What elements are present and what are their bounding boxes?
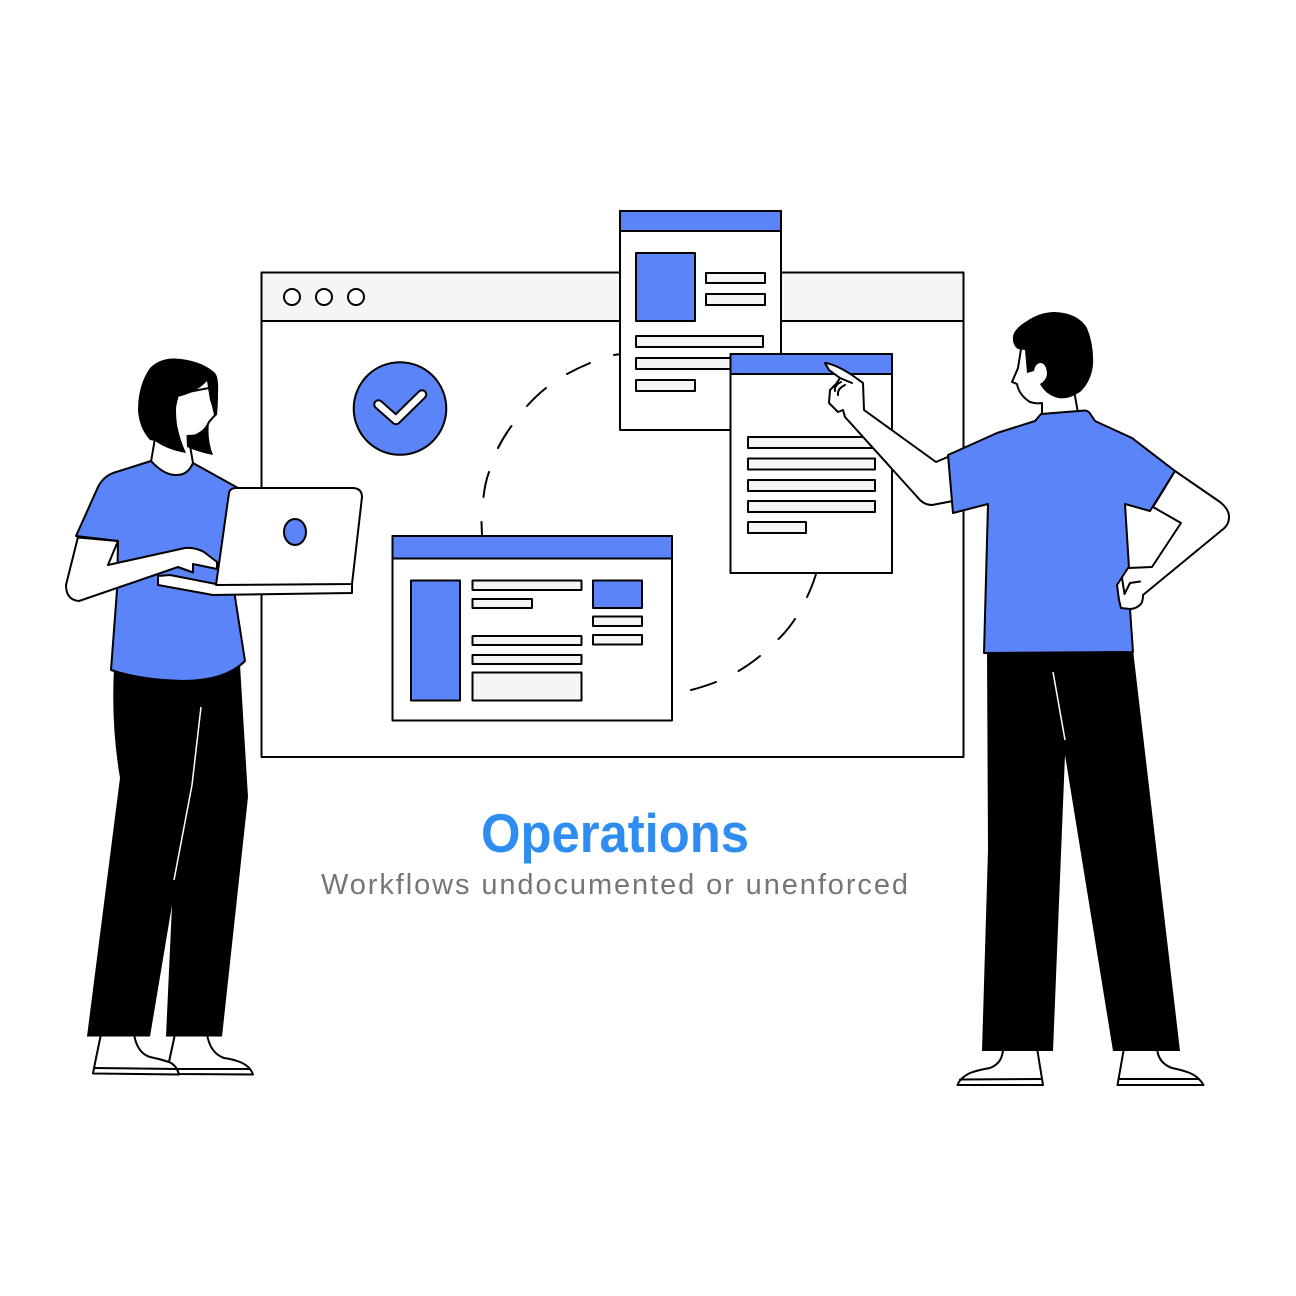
background browser window [262,272,964,757]
subtitle: Workflows undocumented or unenforced [321,869,908,901]
document card: top [620,211,781,430]
man: trousers [982,650,1180,1051]
man: trouser crease [1053,672,1065,740]
icon: check badge [354,362,446,455]
woman: hair [138,358,218,455]
laptop [158,488,362,595]
man: t-shirt [948,410,1175,653]
dashed workflow circle [482,354,816,690]
woman with laptop [66,358,362,1074]
man: face and neck [1012,345,1078,416]
title: Operations: Operations [481,802,749,864]
woman: shoes [93,1034,253,1074]
woman: forearm and hand [66,537,217,601]
document card: bottom left [392,536,672,720]
man: hair [1013,312,1093,398]
window title bar [262,272,964,321]
woman: trouser crease [174,707,201,880]
window control dots [284,289,364,305]
man: shoes [958,1048,1204,1085]
laptop logo [284,519,306,545]
woman: t-shirt [76,461,245,681]
document card: right [730,354,892,573]
man: pointing arm and hand [825,363,953,505]
man pointing [825,312,1229,1085]
woman: trousers [87,665,248,1036]
man: arm on hip [1117,471,1229,609]
woman: neck and face [151,388,215,475]
